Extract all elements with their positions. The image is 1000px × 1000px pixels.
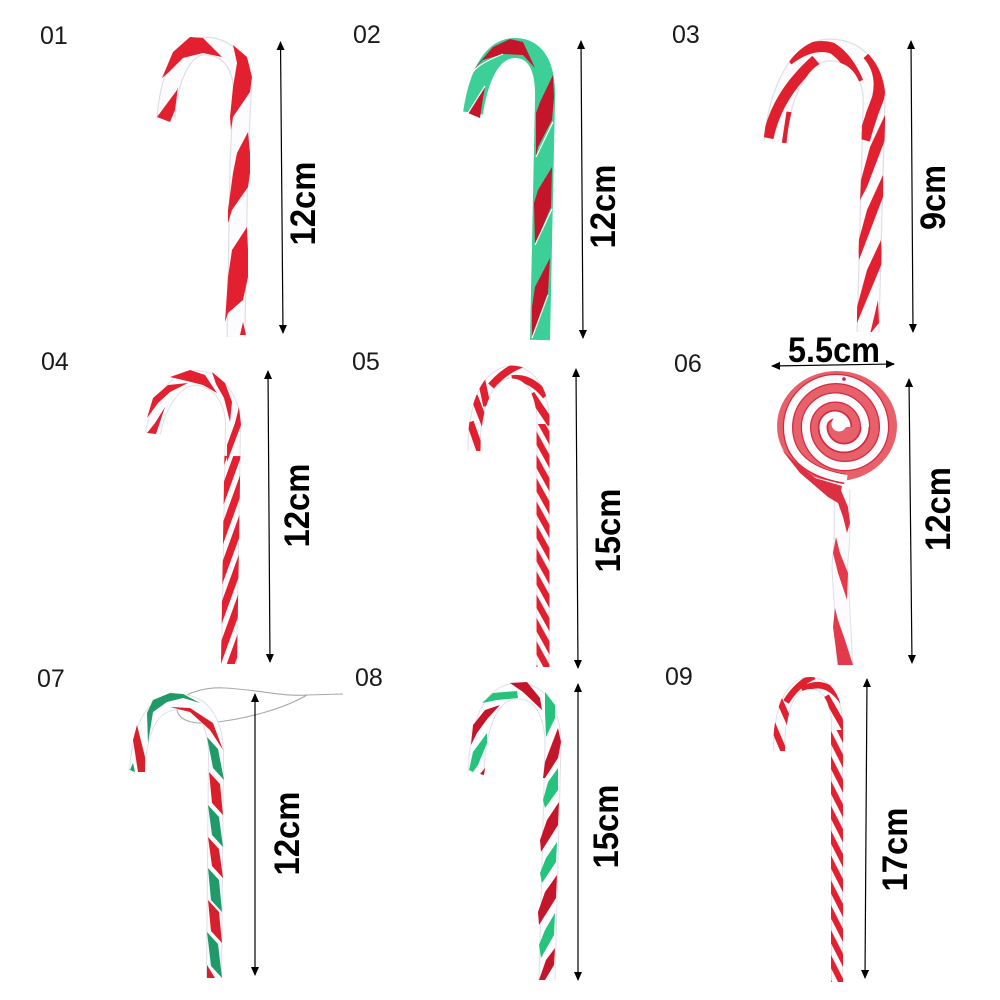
number 04: 04: [41, 348, 69, 376]
number 08: 08: [355, 664, 383, 692]
number 06: 06: [674, 350, 702, 378]
item 03: short thick red and white cane: [672, 21, 953, 334]
size label 12cm: 12cm: [278, 464, 317, 548]
arrow: 12cm height: [581, 41, 583, 338]
arrow: 12cm height: [909, 379, 912, 663]
number 09: 09: [665, 663, 693, 691]
arrow: 15cm height: [576, 369, 578, 668]
size label 12cm: 12cm: [284, 162, 323, 246]
size label 17cm: 17cm: [876, 808, 915, 892]
size label 12cm: 12cm: [268, 792, 307, 876]
cane 08: [469, 682, 561, 980]
item 02: red and green twisted cane: [353, 21, 623, 340]
item 04: red and white cane: [41, 348, 317, 664]
cane 01: [157, 37, 252, 337]
arrow: 12cm height: [254, 694, 256, 975]
number 05: 05: [352, 348, 380, 376]
number 07: 07: [37, 665, 65, 693]
item 01: red and white twisted cane: [40, 22, 323, 337]
cane 04: [147, 370, 241, 664]
lollipop spiral head: [777, 371, 897, 503]
size label 12cm: 12cm: [919, 467, 958, 551]
item 08: green, red and white cane: [355, 664, 626, 980]
cane 09: [771, 676, 846, 982]
size label 9cm: 9cm: [914, 165, 953, 230]
cane 03: [768, 46, 886, 334]
hanging string: [177, 688, 343, 723]
item 06: spiral lollipop: [674, 331, 958, 665]
cane 02: [468, 39, 554, 340]
size label 15cm: 15cm: [587, 784, 626, 868]
size label 15cm: 15cm: [589, 488, 628, 572]
arrow: 15cm height: [577, 684, 579, 980]
arrow: 17cm height: [865, 679, 867, 978]
number 03: 03: [672, 21, 700, 49]
lollipop stick: [833, 488, 853, 665]
cane 07: [130, 693, 224, 978]
size label 5.5cm: 5.5cm: [788, 331, 880, 370]
item 05: slim red and white cane: [352, 348, 628, 668]
arrow: 12cm height: [268, 371, 270, 662]
cane 05: [470, 364, 551, 667]
arrow: 9cm height: [911, 41, 913, 332]
size label 12cm: 12cm: [584, 164, 623, 248]
item 09: thin red and white cane: [665, 663, 915, 982]
arrow: 5.5cm width: [772, 364, 894, 366]
number 02: 02: [353, 21, 381, 49]
arrow: 12cm height: [280, 42, 283, 333]
number 01: 01: [40, 22, 68, 50]
item 07: red, green and white cane with string: [37, 665, 343, 978]
